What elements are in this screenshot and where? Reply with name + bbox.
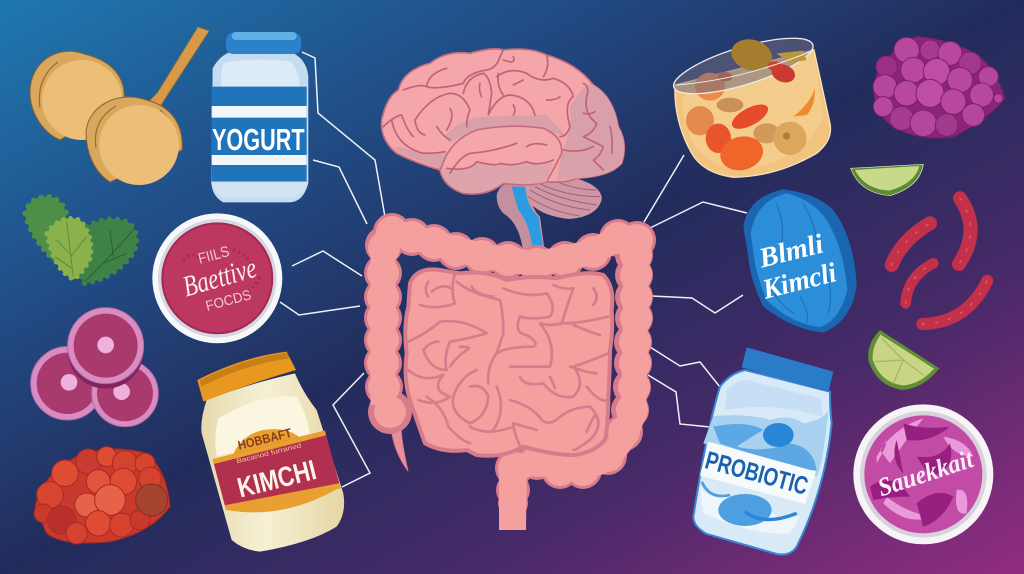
- brain shaded areas: [395, 84, 624, 180]
- icon: lime wedge bottom: [868, 330, 939, 390]
- small intestine: [405, 269, 612, 456]
- brain stem: [497, 183, 545, 253]
- icon: lime wedge top: [851, 164, 923, 196]
- jar small print: Bacanod furraned: [236, 442, 302, 465]
- appendix: [391, 428, 408, 471]
- icon: probiotic bottle: [693, 347, 833, 555]
- gut assembly: [364, 213, 656, 530]
- pouch text line 2: Kimcli: [758, 257, 840, 306]
- icon: red kimchi pile: [34, 447, 170, 544]
- jar brand text: HOBBAFT: [236, 426, 293, 453]
- pouch text line 1: Blmli: [755, 229, 827, 275]
- temporal lobe shade: [442, 161, 553, 193]
- icon: red chili pieces: [892, 198, 987, 324]
- icon: kimchi jar: [197, 352, 344, 552]
- colon body: [367, 216, 653, 515]
- icon: glass jar of fermented vegetables: [668, 27, 831, 177]
- icon: sliced purple roots: [31, 308, 158, 427]
- colon outline bulges: [364, 213, 656, 518]
- colon tube: [383, 234, 636, 468]
- badge top text: FIILS: [196, 243, 231, 268]
- small intestine folds: [408, 273, 608, 450]
- icon: purple cabbage pile: [873, 37, 1005, 138]
- cerebellum: [525, 178, 602, 219]
- brain assembly: [382, 49, 624, 253]
- icon: sauerkraut bowl: [853, 404, 993, 544]
- yogurt label: YOGURT: [212, 123, 305, 157]
- badge main text: Baettive: [179, 252, 260, 303]
- icon: green leaves: [25, 197, 137, 283]
- icon: yogurt jar: [211, 32, 308, 202]
- icon: cookies and wooden stick: [30, 27, 209, 185]
- temporal lobe folds: [447, 143, 553, 173]
- probiotic bottle cap: [742, 347, 833, 392]
- cerebrum: [382, 49, 624, 194]
- jar vegetables: [686, 72, 815, 175]
- sauerkraut label: Sauekkait: [874, 444, 977, 502]
- brain folds: [383, 50, 612, 170]
- badge bottom text: FOCDS: [204, 286, 253, 314]
- brain stem blue nerve: [512, 187, 544, 253]
- icon: blue kimchi pouch: [743, 189, 857, 333]
- rectum: [499, 462, 527, 530]
- probiotic label band: [700, 442, 816, 504]
- icon: fermented foods badge: [152, 213, 282, 343]
- kimchi label: KIMCHI: [234, 454, 319, 504]
- probiotic label: PROBIOTIC: [702, 447, 811, 501]
- temporal lobe: [440, 126, 562, 194]
- jar rim: [668, 27, 818, 105]
- connector lines: [280, 52, 747, 487]
